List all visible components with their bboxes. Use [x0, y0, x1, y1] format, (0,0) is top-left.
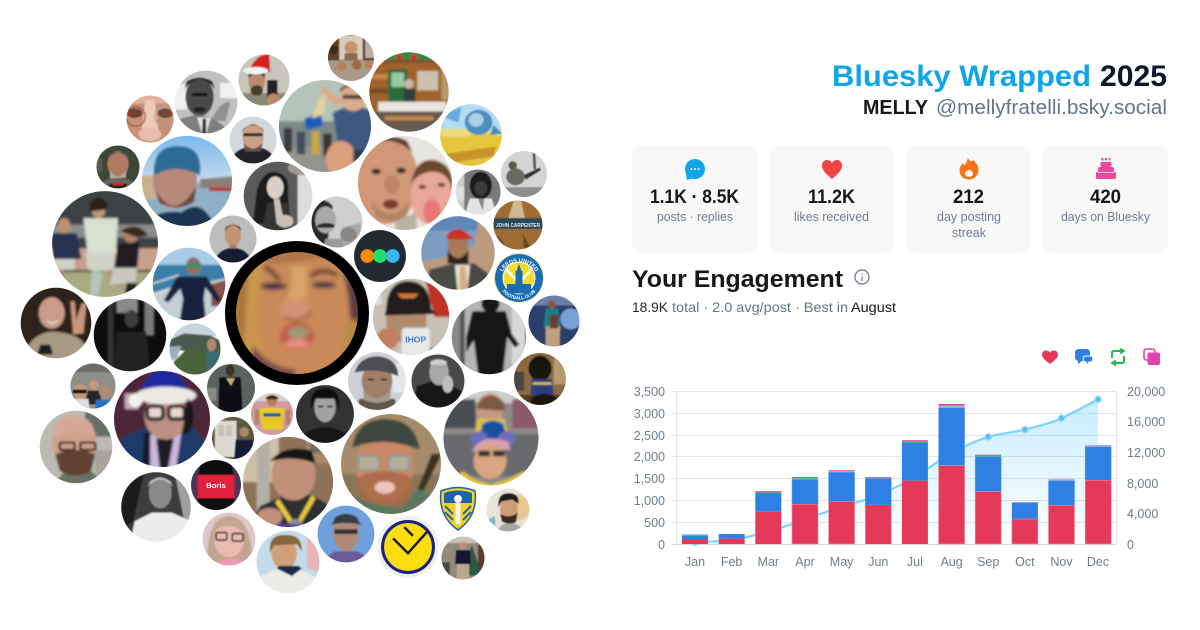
stat value: 11.2K: [808, 187, 855, 208]
heading: your engagement: Your Engagement: [632, 266, 843, 293]
bar: Oct: [1012, 502, 1038, 544]
title: Bluesky Wrapped: [832, 60, 1091, 93]
bar: Apr: [792, 477, 818, 544]
stat value: 1.1K · 8.5K: [650, 187, 739, 208]
avatar: blue beanie man by the water: [142, 136, 232, 226]
panel: posts and replies stat: [632, 145, 757, 253]
avatar: black and white Bielsa: [290, 379, 360, 449]
avatar: man with glasses and dark top: [230, 116, 276, 164]
bar and line chart: [634, 385, 1165, 569]
engagement summary: total · 2.0 avg/post · Best in: [672, 299, 848, 315]
icon: replies legend bubbles: [1075, 349, 1093, 365]
avatar: crowd with smoke and boy on shoulders: [278, 80, 372, 172]
bar: Sep: [975, 455, 1001, 544]
avatar: man with orange longhorn cap and IHOP mug: [372, 278, 450, 356]
stat value: 420: [1090, 187, 1121, 208]
avatar: blue stage performer: [528, 296, 580, 346]
month labels: Nov: [1050, 555, 1073, 569]
avatar: man with peace sign: [20, 288, 92, 358]
month labels: Oct: [1015, 555, 1035, 569]
month labels: Jun: [868, 555, 888, 569]
crest wording top: LEEDS UNITED: [500, 258, 538, 272]
engagement summary: 18.9K: [632, 299, 669, 315]
icon: likes legend heart: [1042, 350, 1058, 364]
avatar: man with moustache monochrome: [312, 196, 362, 248]
cumulative points: [692, 396, 1101, 545]
avatar: black and white woman with cat: [244, 162, 312, 230]
avatar: man with cowboy hat blue sky: [311, 499, 381, 569]
avatar: man in black beanie hat with glasses: [330, 403, 452, 525]
icon: flame: [960, 158, 978, 180]
display name: MELLY: [863, 97, 929, 119]
avatar: blue santa hat Austin Powers style: [114, 371, 210, 467]
avatar: dark silhouette at the window: [452, 300, 526, 374]
panel: streak stat: [906, 145, 1031, 253]
avatar: red glasses nose closeup: [126, 96, 174, 142]
avatar: main profile face with black ring: [224, 240, 370, 386]
avatar: footballers in action: [52, 191, 158, 297]
icon: reposts legend arrows: [1112, 348, 1124, 366]
icon: heart: [822, 160, 842, 179]
stacked bars: [682, 404, 1111, 544]
avatar: cartoon man in Leeds white kit: [250, 524, 326, 600]
avatar: black dog with Leeds top: [508, 347, 572, 411]
panel: likes stat: [769, 145, 894, 253]
avatar: blue and yellow flag art: [440, 104, 502, 166]
avatar: man with lanyard medal: [233, 427, 343, 537]
bar: Jan: [682, 534, 708, 544]
avatar: illustrated bearded man: [482, 484, 534, 536]
avatar: blonde woman with glasses: [197, 507, 261, 571]
bar: Dec: [1085, 445, 1111, 544]
avatar: moody man in doorway: [94, 298, 166, 372]
right axis labels: 20,000: [1127, 385, 1165, 399]
grid lines and axes: [672, 391, 1116, 544]
avatar: statue with gun monochrome: [501, 151, 547, 197]
avatar: group of men selfie: [70, 364, 116, 408]
left axis labels: 0: [658, 538, 665, 552]
avatar: John Carpenter poster: [494, 200, 542, 250]
right axis labels: 0: [1127, 538, 1134, 552]
avatar: black and white man in suit: [174, 70, 238, 134]
month labels: Mar: [758, 555, 779, 569]
month labels: [685, 555, 1109, 569]
stat label: days on Bluesky: [1061, 209, 1150, 224]
bar: Aug: [939, 404, 965, 544]
avatar: mirror selfie with door: [212, 416, 254, 460]
chart legend: [1042, 348, 1160, 366]
stat label: likes received: [794, 209, 869, 224]
left axis labels: 2,000: [634, 450, 665, 464]
avatar: ape in white coat: [456, 170, 500, 214]
stat value: 212: [953, 187, 984, 208]
cumulative line: [695, 399, 1098, 542]
right axis labels: 8,000: [1127, 477, 1158, 491]
left axis labels: 2,500: [634, 429, 665, 443]
month labels: Dec: [1087, 555, 1109, 569]
avatar: diver in wetsuit on boat: [152, 248, 226, 320]
right axis labels: 4,000: [1127, 507, 1158, 521]
left axis labels: 500: [644, 516, 665, 530]
avatar: framed portraits: [328, 35, 374, 81]
avatar: Leeds United round crest: [494, 253, 544, 303]
avatar: bald old man on phone monochrome: [406, 349, 470, 413]
bar: May: [829, 470, 855, 544]
title: 2025: [1100, 60, 1167, 93]
bar: Nov: [1048, 479, 1074, 544]
avatar: man in flat cap: [342, 346, 412, 416]
icon: quotes legend squares: [1144, 349, 1160, 365]
avatar: footballer in yellow kit: [250, 392, 294, 436]
avatar: man with red cap in desert: [421, 216, 495, 290]
left axis labels: 1,000: [634, 494, 665, 508]
avatar: landscape with man at edge: [170, 324, 220, 374]
right axis labels: 16,000: [1127, 415, 1165, 429]
bar: Jun: [865, 477, 891, 544]
avatar: yellow smiley clock crest: [371, 510, 445, 584]
left axis labels: 3,500: [634, 385, 665, 399]
crest wording bottom: FOOTBALL CLUB: [502, 290, 536, 300]
icon: cake: [1096, 158, 1116, 179]
panel: avatar bubble cluster: [20, 35, 580, 594]
panel: days on Bluesky stat: [1043, 145, 1168, 253]
avatar: bald man with glasses and beard: [40, 410, 112, 484]
avatar: child with horn on shoulders: [433, 380, 549, 496]
avatar: Boris Coke bottle: [185, 454, 247, 516]
stat label second line: streak: [952, 225, 986, 240]
month labels: May: [830, 555, 854, 569]
avatar: man in navy against grey wall: [210, 216, 256, 262]
panel: header: [832, 60, 1167, 119]
avatar: dark figure with chain: [207, 364, 255, 412]
month labels: Apr: [795, 555, 815, 569]
avatar: red santa hat selfie: [238, 54, 290, 106]
stat label: day posting: [937, 209, 1001, 224]
avatar: black and white player in Leeds kit: [113, 464, 199, 550]
month labels: Sep: [977, 555, 999, 569]
handle: @mellyfratelli.bsky.social: [936, 97, 1167, 119]
avatar: lego cabin: [369, 52, 449, 132]
right axis labels: 12,000: [1127, 446, 1165, 460]
month labels: Jul: [907, 555, 923, 569]
icon: chat bubble: [685, 159, 705, 180]
bar: Feb: [719, 534, 745, 544]
avatar: Leeds shield badge: [441, 488, 475, 530]
left axis labels: 1,500: [634, 472, 665, 486]
month labels: Aug: [940, 555, 963, 569]
cumulative area: [695, 399, 1098, 544]
bottle name: Boris: [206, 481, 226, 490]
icon: info: [855, 270, 869, 284]
avatar: selfie of dad and son: [358, 136, 452, 230]
month labels: Feb: [721, 555, 742, 569]
month labels: Jan: [685, 555, 705, 569]
left axis labels: [634, 385, 665, 552]
stat label: posts · replies: [657, 209, 733, 224]
mug logo: IHOP: [405, 335, 426, 345]
bar: Mar: [755, 491, 781, 544]
avatar: three coloured dots logo: [354, 230, 406, 282]
engagement summary: August: [851, 299, 896, 315]
left axis labels: 3,000: [634, 407, 665, 421]
avatar: man next to Christmas tree: [437, 532, 489, 584]
bar: Jul: [902, 440, 928, 544]
right axis labels: [1127, 385, 1165, 552]
poster title: JOHN CARPENTER: [496, 223, 540, 229]
avatar: bearded man with black tee: [96, 146, 140, 188]
